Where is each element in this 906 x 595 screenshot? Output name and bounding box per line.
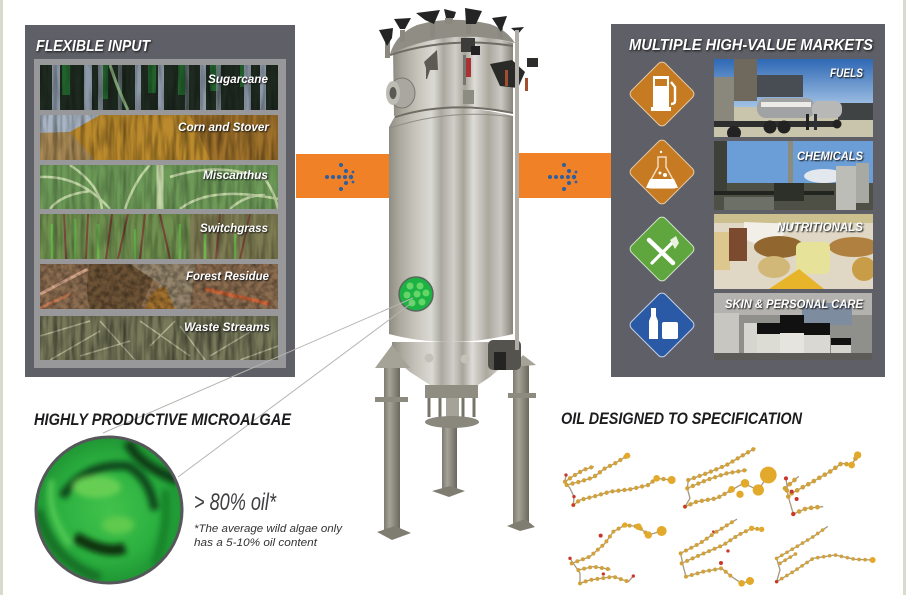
algae close-up circle <box>36 437 182 583</box>
molecule 5 <box>681 519 764 587</box>
label: chemicals: CHEMICALS <box>797 149 863 163</box>
label: corn and stover: Corn and Stover <box>178 120 270 134</box>
molecule 4 <box>568 522 667 583</box>
top clamps <box>379 8 524 58</box>
molecule 3 <box>784 451 861 516</box>
panel: flexible input <box>25 25 295 377</box>
icon: knife and fork <box>628 215 696 283</box>
photo: skin and personal care <box>714 293 872 360</box>
footnote: has a 5-10% oil content <box>194 537 318 549</box>
algae window on vessel <box>399 277 433 311</box>
heading: oil designed to specification: OIL DESIGNED TO SPECIFICATION <box>561 410 803 428</box>
label: sugarcane: Sugarcane <box>208 72 268 86</box>
side port <box>386 78 415 108</box>
flanges and dome <box>390 20 515 128</box>
bottom assembly <box>375 340 536 428</box>
arrow: vessel to markets <box>519 153 611 198</box>
bioreactor vessel <box>375 8 538 540</box>
heading: flexible input: FLEXIBLE INPUT <box>36 38 151 55</box>
inner frame <box>34 59 286 368</box>
icon: chemistry flask <box>628 138 696 206</box>
photo: chemicals <box>714 141 873 210</box>
label: fuels: FUELS <box>830 66 863 80</box>
callout lines to algae close-up <box>103 298 413 477</box>
sight glass <box>424 50 438 79</box>
photo: forest residue <box>40 264 278 309</box>
molecule 2 <box>683 448 777 508</box>
photo: fuels <box>714 59 873 137</box>
panel: multiple high-value markets <box>611 24 885 377</box>
icon: fuel pump <box>628 60 696 128</box>
photo: miscanthus <box>40 165 278 209</box>
upper section <box>393 35 513 116</box>
footnote: *The average wild algae only <box>194 523 344 535</box>
molecule 1 <box>564 453 676 507</box>
main cylinder <box>389 108 513 342</box>
label: nutritionals: NUTRITIONALS <box>777 220 863 234</box>
left edge strip <box>0 0 3 595</box>
photo: nutritionals <box>714 214 873 289</box>
photo: switchgrass <box>40 214 278 259</box>
label: miscanthus: Miscanthus <box>203 168 268 182</box>
label: forest residue: Forest Residue <box>186 269 269 283</box>
legs <box>375 362 536 540</box>
valves and fittings <box>461 38 538 104</box>
molecule 6 <box>775 527 876 583</box>
photo: waste streams <box>40 316 278 360</box>
photo: corn and stover <box>40 115 278 160</box>
heading: multiple high-value markets: MULTIPLE HIGH-VALUE MARKETS <box>629 37 873 54</box>
label: switchgrass: Switchgrass <box>200 221 268 235</box>
label: skin and personal care: SKIN & PERSONAL CARE <box>725 297 864 311</box>
oil molecules <box>564 448 876 587</box>
icon: cosmetic bottles <box>628 291 696 359</box>
arrow: input to vessel <box>296 154 389 198</box>
footnote <box>194 523 344 549</box>
vertical rod <box>515 30 519 350</box>
heading: highly productive microalgae: HIGHLY PRODUCTIVE MICROALGAE <box>34 411 292 429</box>
label: waste streams: Waste Streams <box>184 320 270 334</box>
right edge strip <box>903 0 906 595</box>
stat: oil content: > 80% oil* <box>194 489 276 516</box>
photo: sugarcane <box>40 65 278 110</box>
